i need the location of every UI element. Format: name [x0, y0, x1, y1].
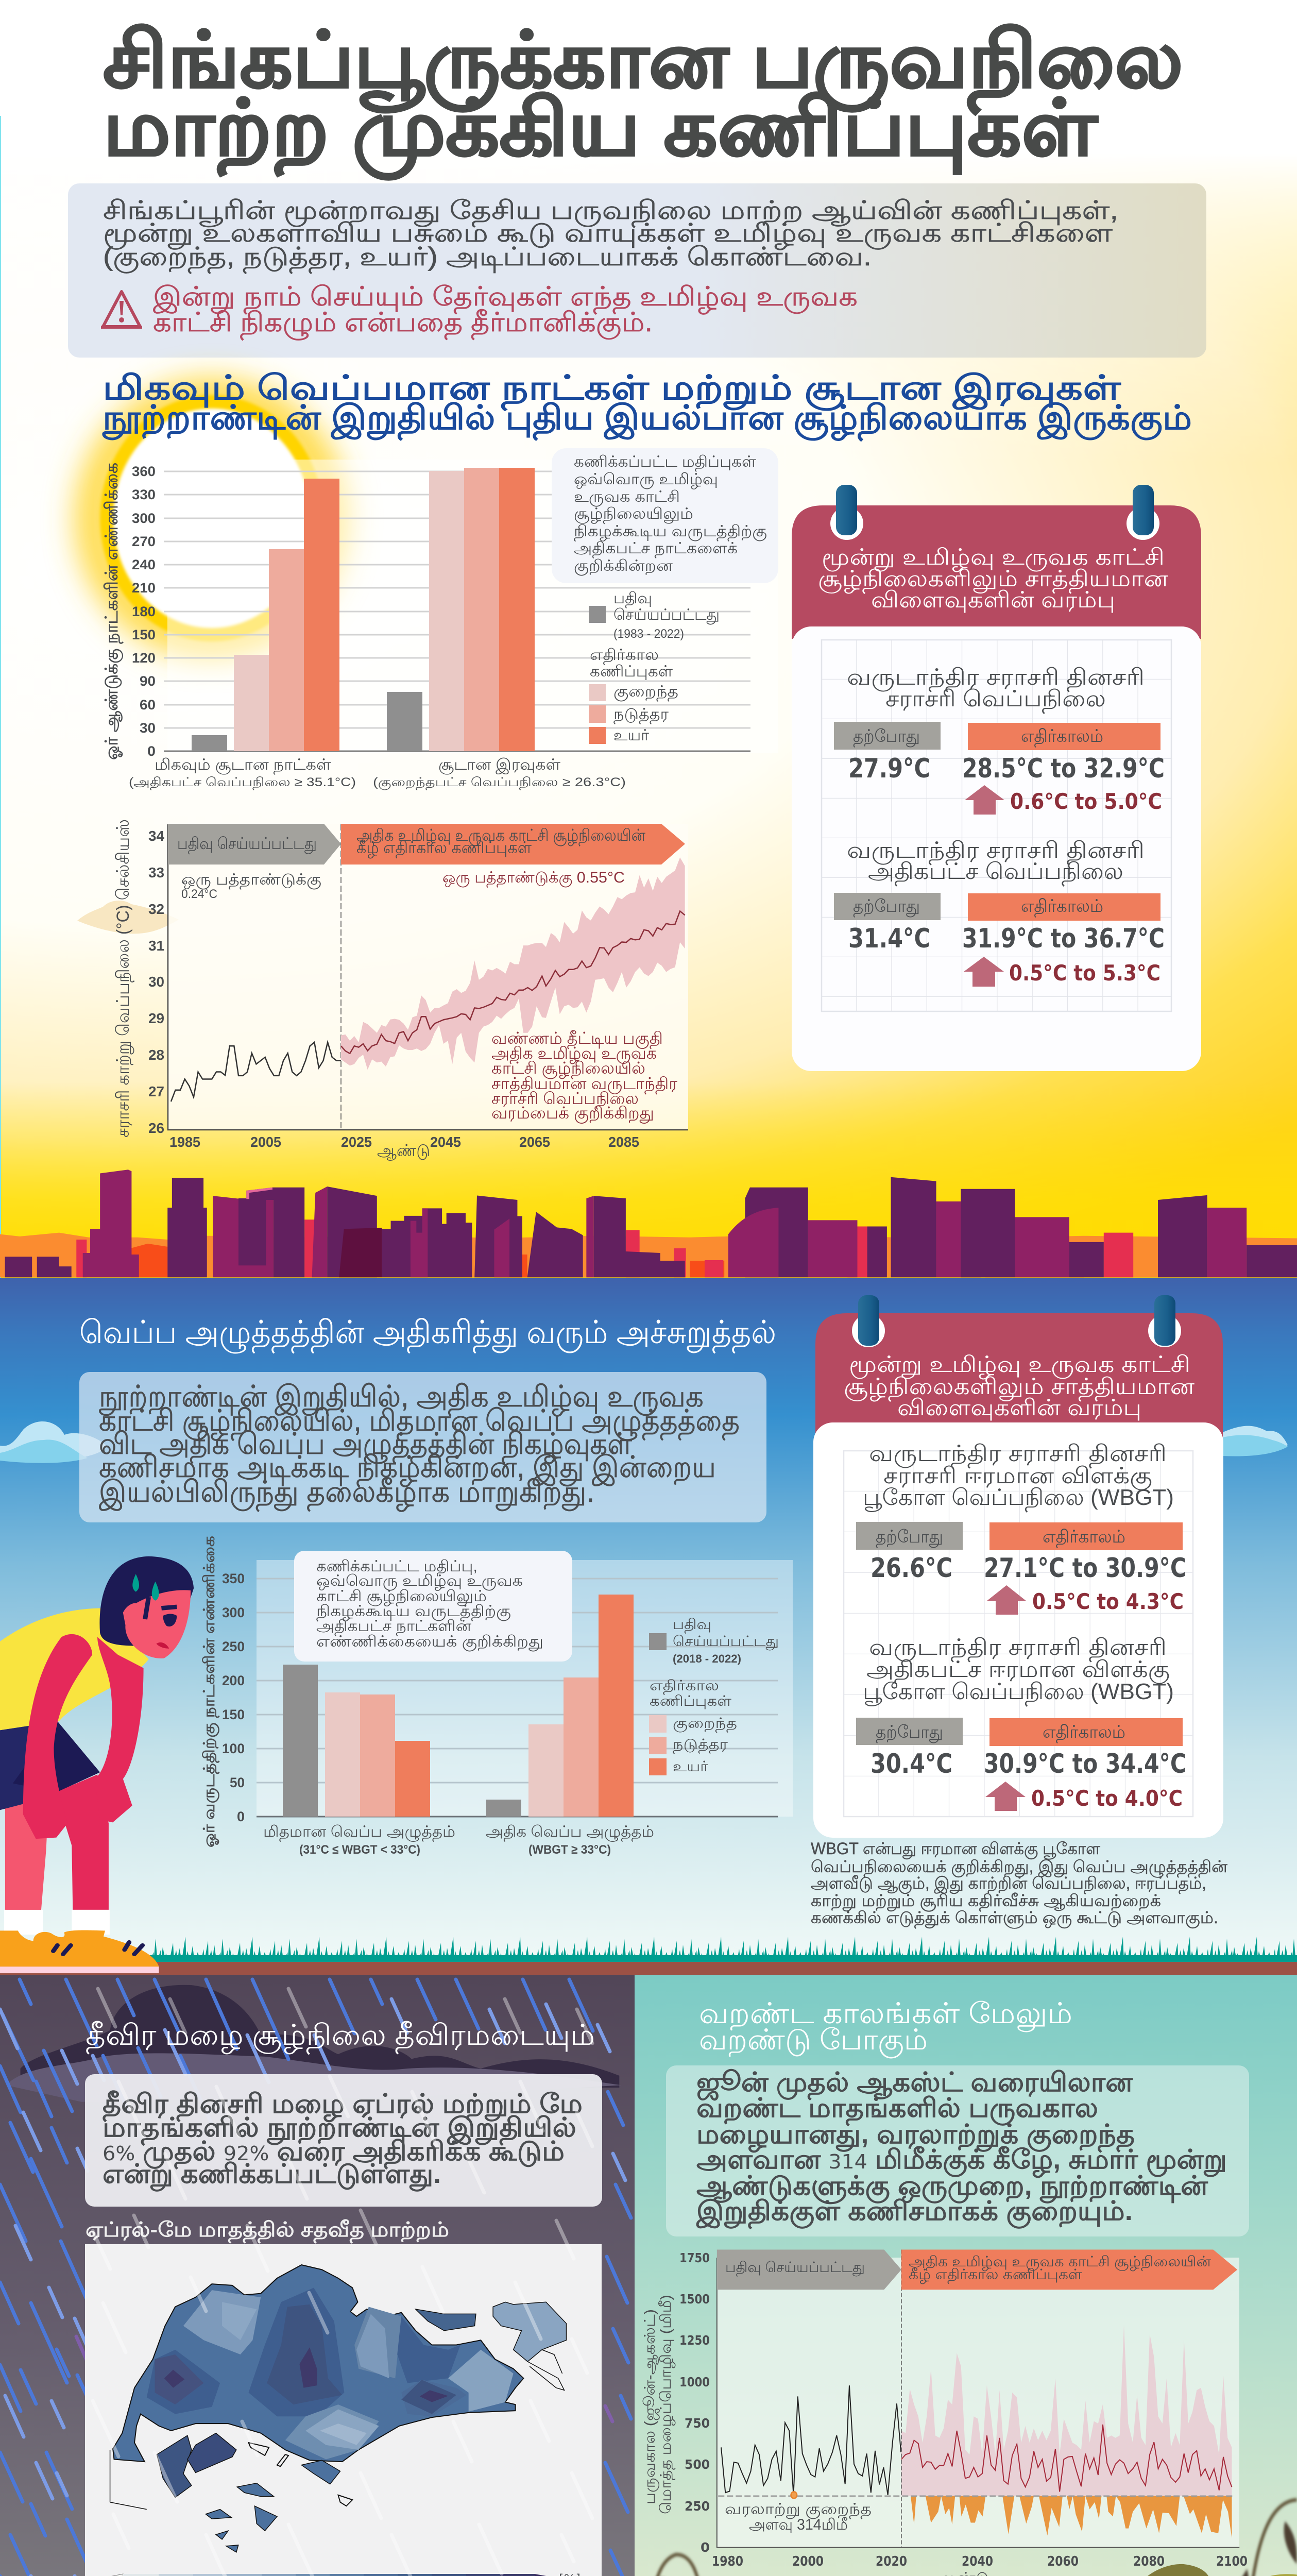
y axis labels: 27 — [148, 1083, 164, 1099]
callout: projected values: உருவக காட்சி — [574, 488, 680, 506]
mean temperature block — [834, 665, 1165, 815]
text box: dry spells summary: அளவான 314 மிமீக்குக் கீழே, சுமார் மூன்று — [696, 2145, 1227, 2178]
legend: எதிர்கால — [590, 647, 659, 665]
intro text: (குறைந்த, நடுத்தர, உயர்) அடிப்படையாகக் கொண்டவை. — [103, 242, 872, 274]
trend label observed — [181, 871, 321, 901]
x axis labels: 1985 — [169, 1134, 200, 1150]
y axis labels: 30 — [140, 720, 156, 736]
maximum temperature block: 31.4°C — [848, 923, 930, 954]
bars: very hot days — [192, 479, 339, 751]
arrow: observed — [168, 824, 341, 865]
title — [103, 16, 1183, 180]
note: WBGT definition: அளவீடு ஆகும், இது காற்றின் வெப்பநிலை, ஈரப்பதம், — [811, 1874, 1206, 1894]
mean WBGT block: வருடாந்திர சராசரி தினசரி — [869, 1441, 1167, 1469]
category labels: மிதமான வெப்ப அழுத்தம் — [263, 1823, 455, 1842]
mean temperature block: 28.5°C to 32.9°C — [962, 753, 1165, 784]
maximum temperature block — [834, 838, 1165, 987]
legend: குறைந்த — [673, 1715, 737, 1733]
callout: projected values — [552, 448, 778, 583]
calendar rings — [852, 1295, 1181, 1347]
note: shaded region: அதிக உமிழ்வு உருவக — [491, 1044, 657, 1064]
panel: dry spells background — [635, 1975, 1297, 2576]
y axis title: ஓர் வருடத்திற்கு நாட்களின் எண்ணிக்கை — [201, 1536, 219, 1848]
calendar title: சூழ்நிலைகளிலும் சாத்தியமான — [844, 1374, 1194, 1402]
x axis labels: 2085 — [608, 1134, 639, 1150]
text box: dry spells summary: மழையானது, வரலாற்றுக் குறைந்த — [696, 2120, 1135, 2153]
text box: heat stress summary: காட்சி சூழ்நிலையில், மிதமான வெப்ப அழுத்தத்தை — [99, 1404, 740, 1441]
category labels: அதிக வெப்ப அழுத்தம் — [486, 1823, 654, 1842]
y axis labels: 180 — [132, 604, 156, 619]
y axis labels: 32 — [148, 901, 164, 917]
mean temperature block: வருடாந்திர சராசரி தினசரி — [847, 665, 1145, 692]
projected rainfall line — [901, 2425, 1232, 2492]
arrow: projections: கீழ் எதிர்கால கணிப்புகள் — [356, 838, 532, 859]
legend: பதிவு — [673, 1616, 711, 1634]
y axis labels: 360 — [132, 464, 156, 479]
y axis labels: 200 — [222, 1673, 245, 1688]
maximum WBGT block: 30.4°C — [871, 1749, 952, 1780]
y axis labels — [679, 2250, 710, 2555]
bars: high heat stress — [486, 1595, 634, 1817]
y axis labels: 350 — [222, 1571, 245, 1586]
mean temperature block: தற்போது — [853, 726, 920, 748]
mean temperature block: 27.9°C — [848, 753, 930, 784]
legend: குறைந்த — [613, 683, 678, 702]
calendar card: WBGT ranges — [813, 1295, 1223, 1838]
text box: extreme rainfall summary — [85, 2074, 602, 2207]
icon: warning triangle — [101, 292, 142, 329]
note: shaded region: சராசரி வெப்பநிலை — [491, 1089, 639, 1110]
panel: extreme rainfall background — [0, 1975, 635, 2576]
panel: heat background — [0, 0, 1297, 1278]
arrow label: observed: பதிவு செய்யப்பட்டது — [725, 2259, 865, 2277]
note: WBGT definition: வெப்பநிலையைக் குறிக்கிறது, இது வெப்ப அழுத்தத்தின் — [811, 1857, 1227, 1878]
text box: heat stress summary: கணிசமாக அடிக்கடி நிகழ்கின்றன, இது இன்றைய — [99, 1450, 716, 1487]
calendar card: temperature ranges — [792, 485, 1201, 1071]
y axis labels: 28 — [148, 1047, 164, 1063]
mean WBGT block: 0.5°C to 4.3°C — [1032, 1589, 1184, 1614]
heading: heat stress: வெப்ப அழுத்தத்தின் அதிகரித்து வரும் அச்சுறுத்தல் — [79, 1315, 776, 1354]
y axis labels: 0 — [237, 1809, 245, 1824]
y axis labels: 300 — [132, 511, 156, 526]
mean temperature block: சராசரி வெப்பநிலை — [885, 686, 1106, 714]
callout: projected value: கணிக்கப்பட்ட மதிப்பு, — [316, 1558, 477, 1577]
callout: projected value: ஒவ்வொரு உமிழ்வு உருவக — [316, 1572, 523, 1591]
heading: dry spells — [699, 1997, 1072, 2058]
calendar title: விளைவுகளின் வரம்பு — [871, 587, 1115, 613]
heading: hot days and warm nights: நூற்றாண்டின் இறுதியில் புதிய இயல்பான சூழ்நிலையாக இருக்கும் — [102, 398, 1192, 442]
note: shaded region — [491, 1029, 677, 1124]
x axis labels — [169, 1134, 639, 1161]
y axis labels: 33 — [148, 865, 164, 880]
mean WBGT block: தற்போது — [876, 1527, 943, 1548]
bar chart: hot days and nights — [102, 448, 778, 790]
text box: extreme rainfall summary: மாதங்களில் நூற்றாண்டின் இறுதியில் — [103, 2113, 576, 2146]
mean WBGT block: எதிர்காலம் — [1043, 1527, 1125, 1548]
category labels — [263, 1823, 654, 1857]
legend — [649, 1616, 779, 1775]
y axis labels: 30 — [148, 974, 164, 990]
illustration: exhausted person — [0, 1556, 194, 1973]
category labels: (அதிகபட்ச வெப்பநிலை ≥ 35.1°C) — [129, 775, 356, 790]
arrow: projections — [341, 824, 685, 865]
x axis labels: 2000 — [792, 2554, 824, 2569]
maximum temperature block: 31.9°C to 36.7°C — [962, 923, 1165, 954]
y axis labels: 26 — [148, 1120, 164, 1136]
arrow: projections: அதிக உமிழ்வு உருவக காட்சி சூழ்நிலையின் — [356, 826, 645, 846]
x axis labels: 2060 — [1047, 2554, 1079, 2569]
projected mean line — [341, 911, 685, 1054]
maximum WBGT block: வருடாந்திர சராசரி தினசரி — [869, 1635, 1167, 1663]
warning text: இன்று நாம் செய்யும் தேர்வுகள் எந்த உமிழ்வு உருவக — [153, 282, 858, 314]
icon: clouds — [0, 1421, 1288, 1463]
historic low label — [725, 2501, 872, 2533]
category labels: மிகவும் சூடான நாட்கள் — [155, 756, 331, 775]
y axis title: ஓர் ஆண்டுக்கு நாட்களின் எண்ணிக்கை — [102, 463, 123, 760]
historic low label: வரலாற்று குறைந்த — [725, 2501, 872, 2519]
colour bar — [105, 2572, 581, 2576]
category labels: (31°C ≤ WBGT < 33°C) — [299, 1843, 420, 1857]
x axis labels — [712, 2554, 1248, 2576]
y axis labels — [148, 828, 164, 1136]
category labels: சூடான இரவுகள் — [438, 756, 560, 774]
x axis labels: 2040 — [962, 2554, 993, 2569]
mean WBGT block: சராசரி ஈரமான விளக்கு — [883, 1463, 1152, 1490]
maximum WBGT block: 30.9°C to 34.4°C — [984, 1749, 1186, 1780]
legend: செய்யப்பட்டது — [673, 1633, 779, 1651]
callout: projected values: நிகழக்கூடிய வருடத்திற்கு — [574, 523, 767, 541]
callout: projected values: கணிக்கப்பட்ட மதிப்புகள் — [574, 453, 756, 472]
calendar title: சூழ்நிலைகளிலும் சாத்தியமான — [818, 566, 1168, 594]
maximum WBGT block: 0.5°C to 4.0°C — [1031, 1786, 1183, 1811]
icon: sun glow — [94, 397, 329, 639]
bars: warm nights — [387, 468, 535, 751]
panel: introduction — [68, 183, 1206, 358]
x axis labels: 2065 — [519, 1134, 550, 1150]
icon: cloud behind chart — [77, 901, 179, 934]
maximum WBGT block: பூகோள வெப்பநிலை (WBGT) — [863, 1679, 1174, 1707]
legend — [589, 590, 720, 744]
heading: hot days and warm nights — [102, 368, 1192, 442]
illustration: grass strip — [0, 1935, 1297, 1975]
arrow label: projections — [909, 2253, 1211, 2284]
calendar title: மூன்று உமிழ்வு உருவக காட்சி — [849, 1352, 1190, 1380]
x axis labels: 2005 — [250, 1134, 281, 1150]
text box: dry spells summary — [666, 2065, 1249, 2236]
y axis labels: 330 — [132, 487, 156, 502]
y axis labels: 29 — [148, 1010, 164, 1026]
bar chart: heat stress days — [201, 1536, 793, 1857]
maximum temperature block: 0.5°C to 5.3°C — [1009, 960, 1161, 986]
x axis labels: 2045 — [430, 1134, 461, 1150]
y axis labels: 250 — [222, 1639, 245, 1654]
map heading: ஏப்ரல்-மே மாதத்தில் சதவீத மாற்றம் — [86, 2218, 449, 2244]
arrow: observed: பதிவு செய்யப்பட்டது — [177, 834, 317, 854]
y axis labels: 1000 — [679, 2375, 710, 2389]
y axis labels — [222, 1571, 245, 1824]
note: shaded region: வண்ணம் தீட்டிய பகுதி — [491, 1029, 663, 1049]
y axis labels: 750 — [685, 2416, 710, 2431]
callout: projected value: காட்சி சூழ்நிலையிலும் — [316, 1588, 487, 1606]
maximum WBGT block: எதிர்காலம் — [1043, 1722, 1125, 1743]
mean WBGT block: பூகோள வெப்பநிலை (WBGT) — [863, 1485, 1174, 1513]
y axis labels: 1750 — [679, 2250, 710, 2265]
note: WBGT definition: WBGT என்பது ஈரமான விளக்கு பூகோள — [811, 1839, 1100, 1859]
illustration: parched ground — [635, 2564, 1297, 2576]
y axis labels: 210 — [132, 580, 156, 596]
y axis labels: 0 — [147, 743, 156, 759]
maximum WBGT block: தற்போது — [876, 1722, 943, 1743]
mean temperature block: எதிர்காலம் — [1021, 726, 1103, 748]
main island contours — [110, 2265, 566, 2552]
y axis labels: 250 — [685, 2499, 710, 2514]
y axis labels: 100 — [222, 1741, 245, 1756]
text box: dry spells summary: இறுதிக்குள் கணிசமாகக் குறையும். — [696, 2196, 1133, 2230]
mean temperature block: 0.6°C to 5.0°C — [1010, 789, 1162, 814]
heading: dry spells: வறண்டு போகும் — [699, 2023, 928, 2058]
y axis labels: 1500 — [679, 2292, 710, 2307]
illustration: wilted plants — [652, 2500, 1297, 2576]
observed rainfall line — [721, 2385, 901, 2495]
illustration: rain over panels — [93, 1989, 592, 2576]
heading: dry spells: வறண்ட காலங்கள் மேலும் — [699, 1997, 1072, 2032]
intro text: மூன்று உலகளாவிய பசுமை கூடு வாயுக்கள் உமிழ்வு உருவக காட்சிகளை — [103, 218, 1113, 250]
maximum temperature block: எதிர்காலம் — [1021, 896, 1103, 918]
y axis labels: 120 — [132, 650, 156, 666]
text box: dry spells summary: வறண்ட மாதங்களில் பருவகால — [696, 2093, 1098, 2127]
legend: உயர் — [613, 727, 649, 744]
callout: projected value — [294, 1551, 572, 1662]
legend: நடுத்தர — [673, 1736, 728, 1754]
y axis labels: 31 — [148, 938, 164, 954]
callout: projected values: சூழ்நிலையிலும் — [574, 505, 693, 524]
heading: hot days and warm nights: மிகவும் வெப்பமான நாட்கள் மற்றும் சூடான இரவுகள் — [103, 368, 1122, 412]
y axis labels: 1250 — [679, 2333, 710, 2348]
bars: moderate heat stress — [283, 1665, 430, 1817]
text box: heat stress summary: விட அதிக வெப்ப அழுத்தத்தின் நிகழ்வுகள் — [99, 1427, 632, 1464]
text box: heat stress summary: நூற்றாண்டின் இறுதியில், அதிக உமிழ்வு உருவக — [99, 1380, 704, 1416]
y axis labels — [132, 464, 156, 759]
category labels: (குறைந்தபட்ச வெப்பநிலை ≥ 26.3°C) — [373, 775, 626, 790]
legend: நடுத்தர — [613, 706, 669, 724]
illustration: city skyline — [0, 1170, 1297, 1277]
y axis title — [642, 2295, 676, 2514]
text box: extreme rainfall summary: என்று கணிக்கப்பட்டுள்ளது. — [103, 2159, 441, 2192]
text box: dry spells summary: ஜூன் முதல் ஆகஸ்ட் வரையிலான — [696, 2067, 1133, 2101]
y axis labels: 500 — [685, 2457, 710, 2472]
line chart: seasonal rainfall — [642, 2249, 1248, 2576]
y axis labels: 60 — [140, 697, 156, 713]
warning text — [153, 282, 858, 341]
callout: projected value: எண்ணிக்கையைக் குறிக்கிறது — [316, 1633, 543, 1651]
y axis labels: 0 — [701, 2540, 710, 2555]
calendar title — [844, 1352, 1194, 1420]
illustration: rain streaks — [0, 1979, 631, 2576]
callout: projected values: அதிகபட்ச நாட்களைக் — [574, 540, 738, 558]
category labels — [129, 756, 626, 790]
calendar title: மூன்று உமிழ்வு உருவக காட்சி — [822, 545, 1165, 572]
legend: (2018 - 2022) — [673, 1652, 741, 1665]
map: April-May percentage change — [85, 2244, 602, 2576]
panel: heat stress background — [0, 1278, 1297, 1963]
text box: extreme rainfall summary: 6% முதல் 92% வரை அதிகரிக்க கூடும் — [103, 2137, 565, 2170]
calendar rings — [830, 485, 1159, 540]
y axis title: சராசரி காற்று வெப்பநிலை (°C) செல்சியஸ் — [113, 819, 135, 1138]
y axis title: பருவகால (ஜூன்-ஆகஸ்ட்) — [642, 2309, 660, 2504]
maximum temperature block: தற்போது — [853, 896, 920, 918]
y axis labels: 150 — [132, 627, 156, 642]
x axis labels: 1980 — [712, 2554, 743, 2569]
text box: heat stress summary — [79, 1372, 766, 1522]
legend: எதிர்கால — [650, 1677, 719, 1695]
maximum WBGT block — [856, 1635, 1186, 1811]
legend: உயர் — [673, 1758, 708, 1774]
callout: projected values: குறிக்கின்றன — [574, 557, 673, 575]
y axis labels: 300 — [222, 1605, 245, 1620]
note: WBGT definition: கணக்கில் எடுத்துக் கொள்ளும் ஒரு கூட்டு அளவாகும். — [811, 1908, 1218, 1929]
arrow label: projections: கீழ் எதிர்கால கணிப்புகள் — [909, 2266, 1083, 2284]
maximum temperature block: அதிகபட்ச வெப்பநிலை — [868, 859, 1123, 887]
heading: extreme rainfall: தீவிர மழை சூழ்நிலை தீவிரமடையும் — [86, 2019, 595, 2055]
y axis labels: 34 — [148, 828, 164, 844]
y axis labels: 270 — [132, 534, 156, 549]
mean WBGT block: 27.1°C to 30.9°C — [984, 1553, 1186, 1584]
trend label observed: 0.24°C — [181, 887, 217, 901]
legend: செய்யப்பட்டது — [613, 606, 720, 624]
title: மாற்ற முக்கிய கணிப்புகள் — [103, 84, 1098, 180]
note: shaded region: சாத்தியமான வருடாந்திர — [491, 1074, 677, 1095]
legend: பதிவு — [613, 590, 652, 608]
observed line — [171, 1042, 341, 1101]
y axis labels: 90 — [140, 673, 156, 689]
note: WBGT definition — [811, 1839, 1227, 1929]
x axis labels: 2020 — [876, 2554, 907, 2569]
text box: dry spells summary: ஆண்டுகளுக்கு ஒருமுறை, நூற்றாண்டின் — [696, 2171, 1208, 2204]
y axis title: மொத்த மழைப்பொழிவு (மிமீ) — [658, 2295, 676, 2514]
callout: projected values: ஒவ்வொரு உமிழ்வு — [574, 471, 718, 489]
x axis labels: 2100 — [1216, 2554, 1248, 2569]
callout: projected value: அதிகபட்ச நாட்களின் — [316, 1618, 471, 1636]
warning text: காட்சி நிகழும் என்பதை தீர்மானிக்கும். — [153, 308, 653, 341]
callout: projected value: நிகழக்கூடிய வருடத்திற்கு — [316, 1603, 511, 1621]
text box: heat stress summary: இயல்பிலிருந்து தலைகீழாக மாறுகிறது. — [99, 1475, 594, 1512]
x axis labels: 2025 — [341, 1134, 372, 1150]
legend: கணிப்புகள் — [650, 1693, 732, 1709]
y axis labels: 50 — [230, 1775, 245, 1790]
uncertainty band — [341, 857, 685, 1070]
y axis labels: 150 — [222, 1707, 245, 1722]
intro text: சிங்கப்பூரின் மூன்றாவது தேசிய பருவநிலை மாற்ற ஆய்வின் கணிப்புகள், — [103, 196, 1118, 228]
title: சிங்கப்பூருக்கான பருவநிலை — [103, 16, 1183, 115]
below historic low — [911, 2496, 1232, 2538]
y axis labels: 240 — [132, 557, 156, 572]
note: shaded region: வரம்பைக் குறிக்கிறது — [491, 1104, 654, 1124]
category labels: (WBGT ≥ 33°C) — [528, 1843, 611, 1857]
mean WBGT block — [856, 1441, 1186, 1615]
historic low label: அளவு 314மிமீ — [749, 2516, 848, 2533]
trend label projected: ஒரு பத்தாண்டுக்கு 0.55°C — [442, 869, 625, 888]
trend label observed: ஒரு பத்தாண்டுக்கு — [181, 871, 321, 890]
projected rainfall band — [901, 2325, 1232, 2496]
maximum WBGT block: அதிகபட்ச ஈரமான விளக்கு — [866, 1657, 1170, 1684]
note: WBGT definition: காற்று மற்றும் சூரிய கதிர்வீச்சு ஆகியவற்றைக் — [811, 1891, 1161, 1911]
line chart: annual maximum temperature — [113, 819, 688, 1161]
illustration: storm clouds — [6, 1985, 621, 2102]
legend: (1983 - 2022) — [613, 627, 684, 641]
calendar title — [818, 545, 1168, 613]
x axis labels: 2080 — [1133, 2554, 1165, 2569]
legend: கணிப்புகள் — [590, 663, 673, 680]
text box: extreme rainfall summary: தீவிர தினசரி மழை ஏப்ரல் மற்றும் மே — [103, 2089, 583, 2123]
intro text — [103, 196, 1118, 274]
arrow label: projections: அதிக உமிழ்வு உருவக காட்சி சூழ்நிலையின் — [909, 2253, 1211, 2271]
note: shaded region: காட்சி சூழ்நிலையில் — [491, 1059, 645, 1079]
x axis labels: ஆண்டு — [377, 1141, 430, 1161]
mean WBGT block: 26.6°C — [871, 1553, 952, 1584]
maximum temperature block: வருடாந்திர சராசரி தினசரி — [847, 838, 1145, 866]
calendar title: விளைவுகளின் வரம்பு — [897, 1395, 1141, 1420]
